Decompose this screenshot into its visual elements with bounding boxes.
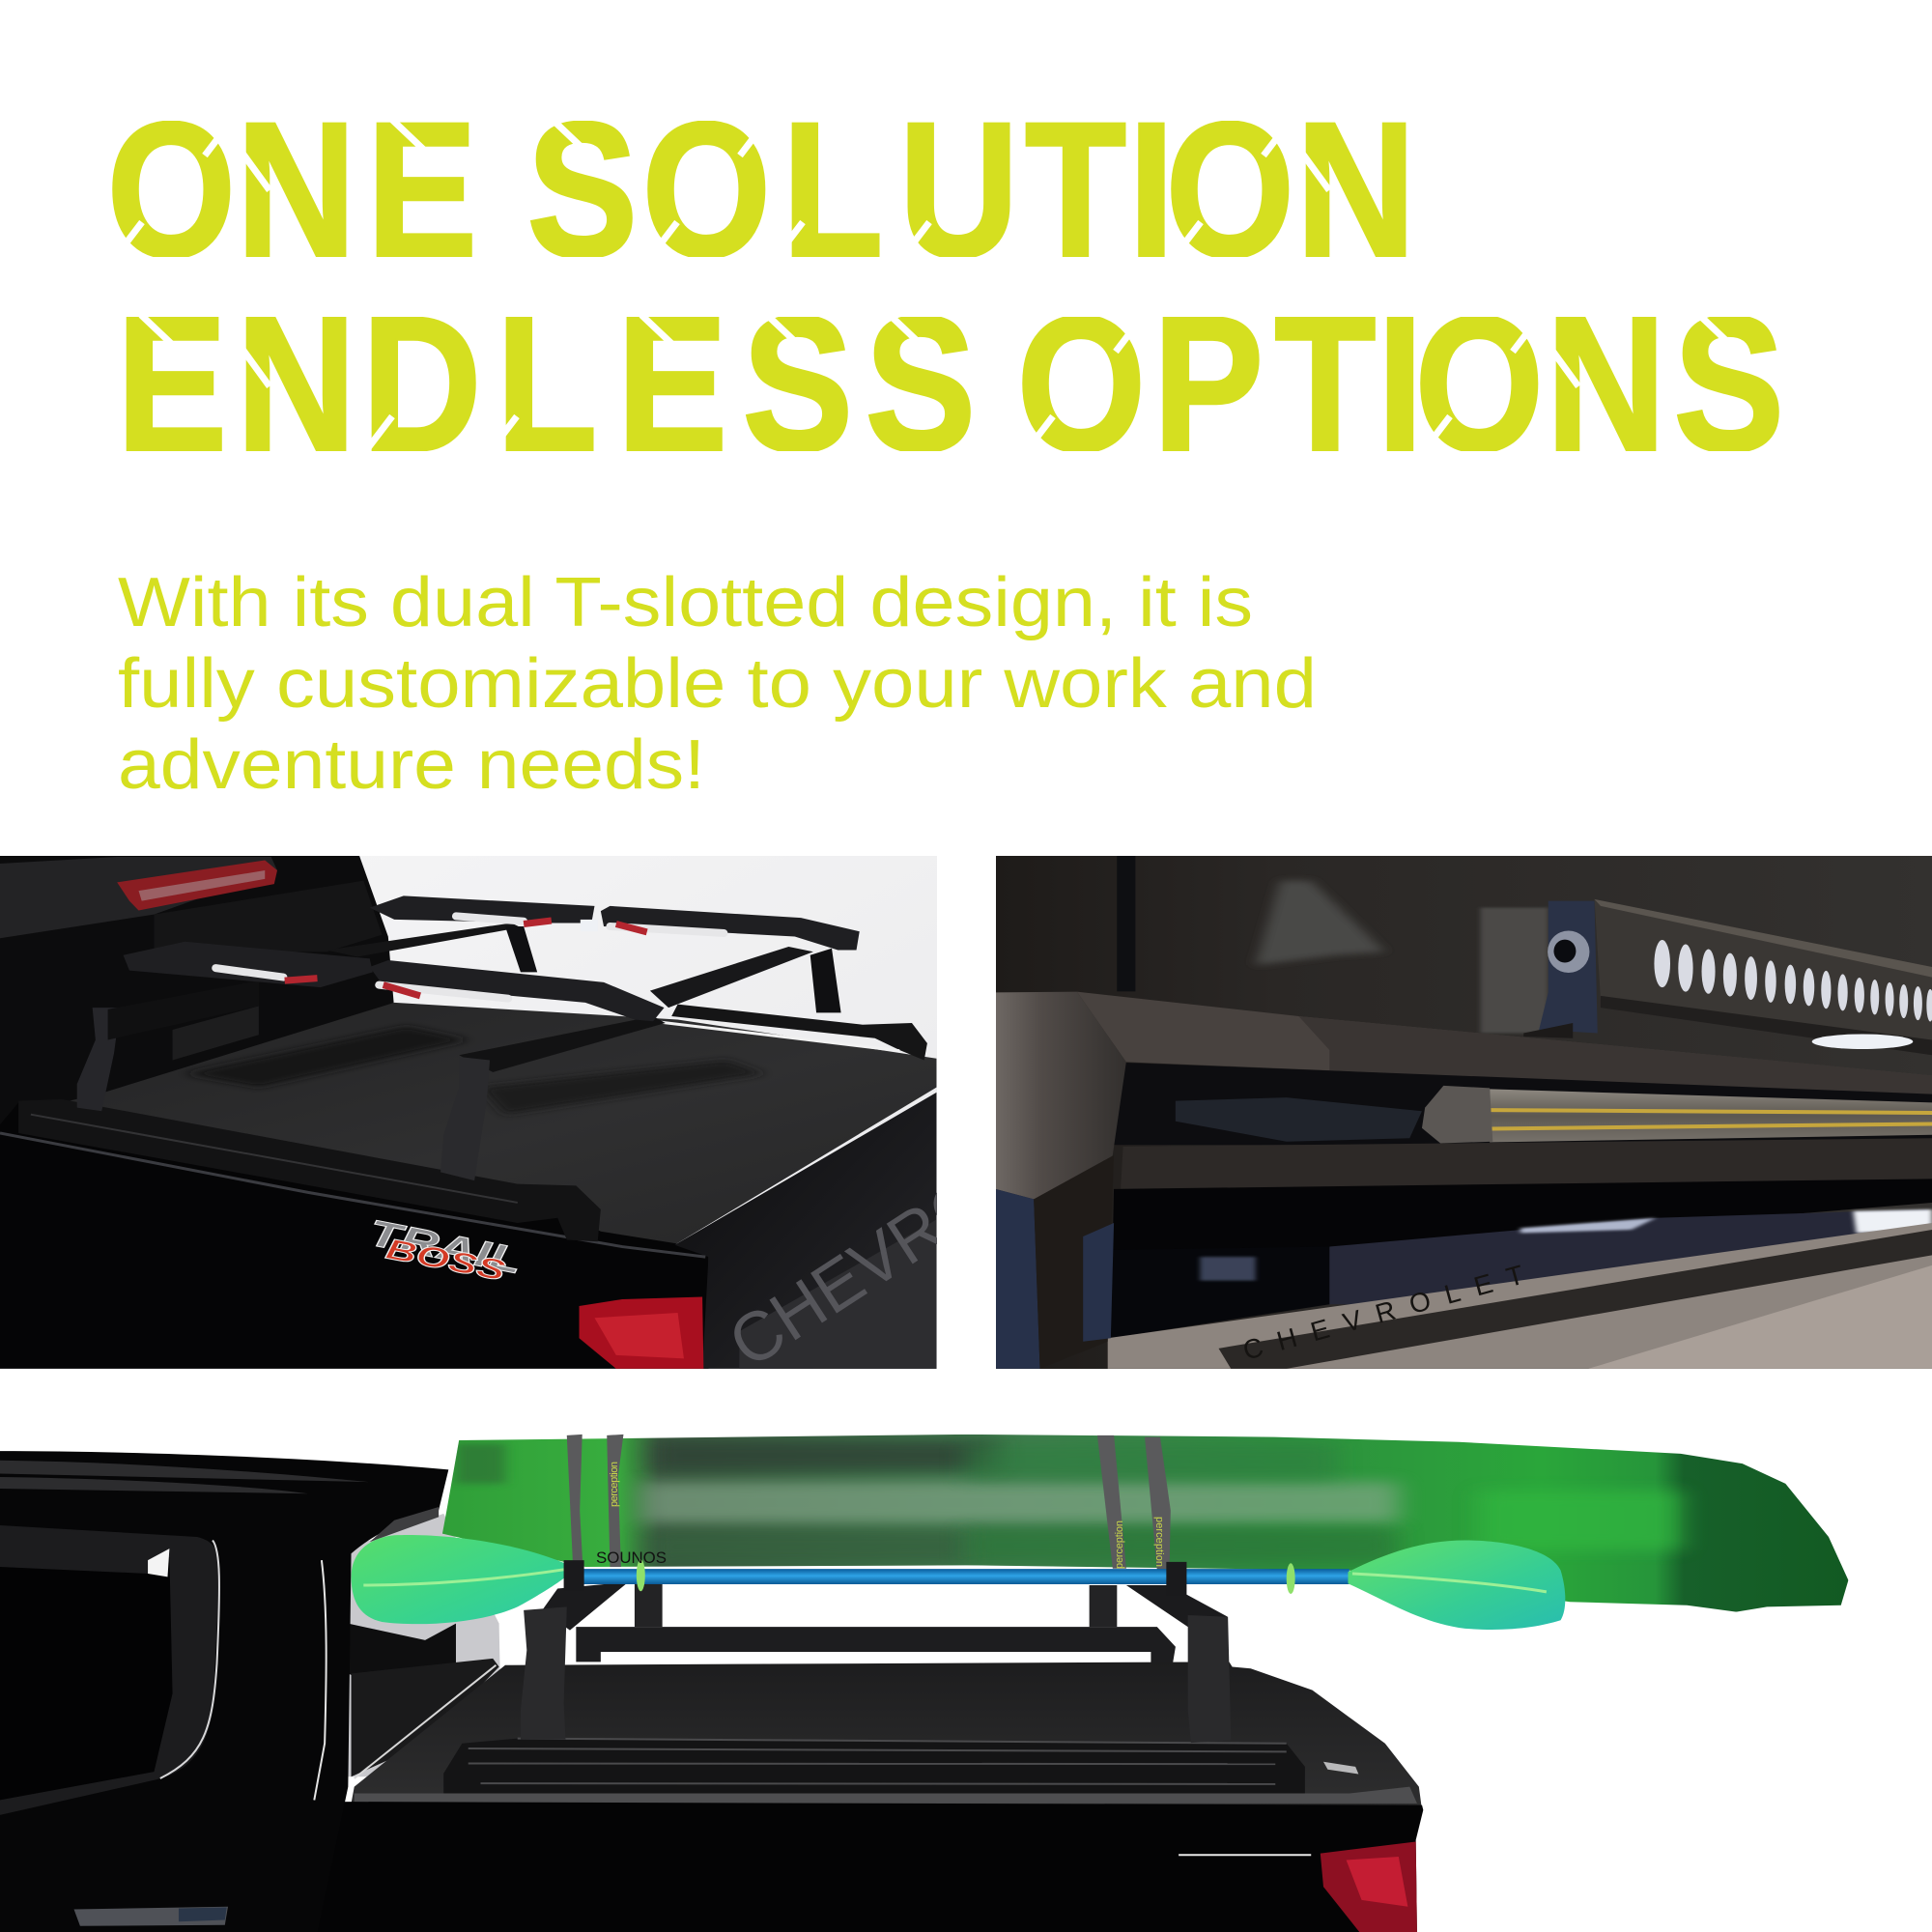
kayak logo: SOUNOS — [596, 1548, 667, 1567]
embossed brand text: CHEVROLET — [1239, 1260, 1527, 1366]
gold LED lines — [1491, 1110, 1932, 1128]
truck body lower — [0, 1802, 1423, 1932]
truck cab and bed scene — [0, 850, 936, 1369]
body highlight — [1179, 1854, 1311, 1856]
badge: trail boss: BOSS — [384, 1233, 508, 1288]
panel: photo of light bar and LED strip on rack — [996, 856, 1932, 1369]
kayak straps — [567, 1435, 1171, 1571]
tail light — [1321, 1842, 1417, 1932]
LED lenses — [1654, 940, 1932, 1022]
cab rear glass — [342, 1514, 502, 1776]
cab — [0, 850, 394, 1149]
badge: trail boss — [374, 1219, 518, 1279]
far side rail — [671, 1005, 927, 1061]
strap print: perception — [1114, 1520, 1125, 1569]
kayak hull — [431, 1431, 1855, 1617]
lower rail — [1121, 1138, 1932, 1188]
truck bed rail edge — [355, 1787, 1417, 1804]
paddle right blade — [1349, 1540, 1565, 1630]
title line 1: ONE SOLUTION — [107, 83, 1416, 298]
paragraph line 2: fully customizable to your work and — [118, 645, 1317, 723]
paddle drip rings — [637, 1559, 645, 1591]
up label — [580, 920, 592, 923]
dark channel — [1108, 1062, 1932, 1145]
rack angled rails — [542, 1582, 629, 1631]
side rail — [18, 1099, 601, 1241]
panel: photo of truck with folding rack — [0, 856, 937, 1369]
title: one solution endless options — [112, 121, 1779, 451]
corrugated conduit — [1176, 1097, 1422, 1142]
reflection streak — [1812, 1035, 1913, 1049]
light bar bracket — [1539, 901, 1598, 1033]
paddle clamps — [564, 1560, 584, 1590]
embossed rail strip — [1218, 1230, 1932, 1369]
left corner post — [996, 992, 1126, 1199]
far rack rail — [327, 923, 521, 957]
blurred background shapes — [1481, 908, 1548, 1033]
door handle — [74, 1907, 228, 1926]
white tubes — [215, 916, 724, 999]
red levers — [285, 921, 647, 996]
side window — [0, 1525, 219, 1815]
panel: photo of truck carrying kayak and paddle — [0, 1431, 1855, 1932]
light bar housing — [1594, 900, 1857, 1030]
camera lens — [1548, 931, 1589, 973]
tailgate lettering: CHEVROLET — [716, 1092, 1106, 1382]
LED strip tube — [1490, 1089, 1932, 1142]
truck body — [0, 1102, 708, 1369]
title line 2: ENDLESS OPTIONS — [117, 277, 1784, 492]
strap print: perception — [1153, 1517, 1165, 1567]
paddle shaft — [580, 1569, 1350, 1584]
cab body — [0, 1451, 448, 1932]
rack base frame — [443, 1739, 1305, 1794]
strap print — [609, 1462, 1165, 1569]
brake light — [117, 861, 277, 910]
top rail — [1077, 991, 1329, 1070]
badge: trail boss: TRAIL — [365, 1213, 525, 1282]
rear rack crossbar — [576, 1627, 1176, 1665]
bed rail band — [1108, 1223, 1932, 1369]
rack legs — [521, 1606, 567, 1740]
tube end cap — [1422, 1086, 1492, 1144]
label on bed rail — [1323, 1762, 1358, 1775]
near rack rail — [459, 1016, 666, 1072]
tonneau cover — [352, 1662, 1422, 1810]
strap print: perception — [609, 1462, 620, 1507]
dark opening — [1113, 1179, 1932, 1250]
paragraph line 3: adventure needs! — [118, 726, 705, 804]
tonneau cover — [25, 1003, 936, 1245]
paddle left blade — [352, 1535, 566, 1624]
tail light — [580, 1296, 703, 1369]
intro paragraph — [118, 564, 1317, 804]
rear rack uprights — [635, 1582, 663, 1627]
fender side — [674, 1093, 936, 1369]
kayak mottling — [640, 1482, 1399, 1523]
rack uprights — [77, 926, 841, 1180]
crossbars — [124, 895, 860, 1021]
paragraph line 1: With its dual T-slotted design, it is — [118, 564, 1253, 641]
